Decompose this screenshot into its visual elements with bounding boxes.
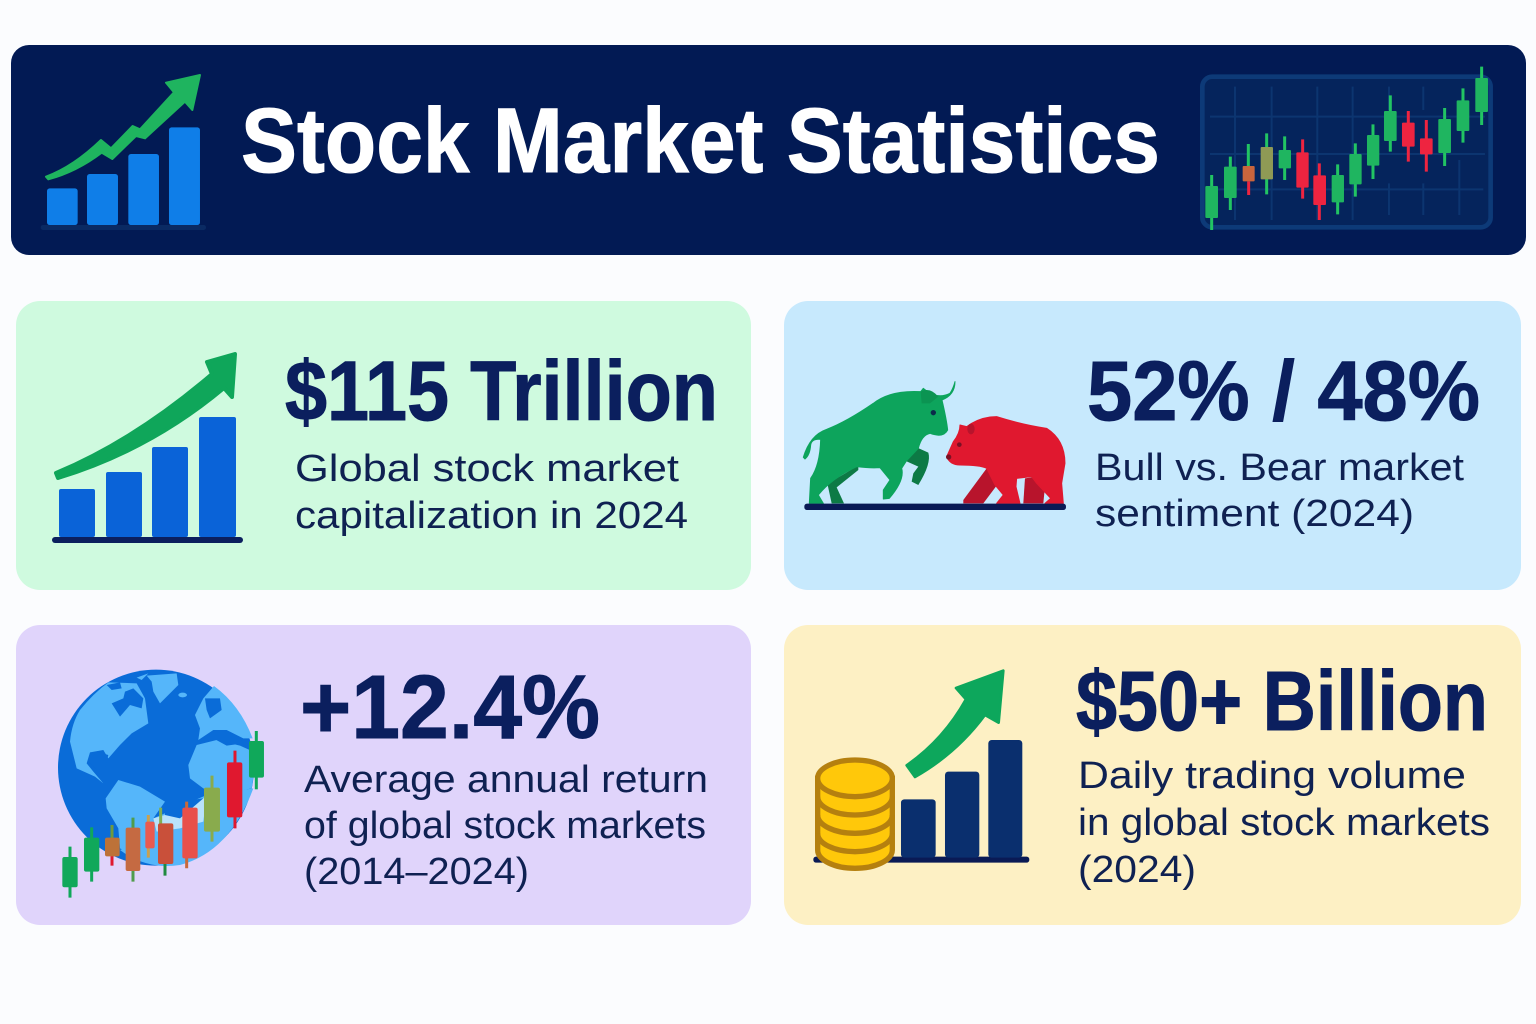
stat value: 52% / 48% — [1087, 344, 1480, 438]
stat value: $50+ Billion — [1076, 654, 1488, 748]
description line two: capitalization in 2024 — [295, 495, 688, 537]
icon: header bar chart with rising arrow — [41, 75, 206, 230]
description line two: sentiment (2024) — [1095, 493, 1414, 535]
panel: daily trading volume — [784, 625, 1521, 925]
description line three: (2024) — [1078, 849, 1196, 891]
title: Stock Market Statistics — [241, 90, 1160, 192]
icon: bar chart with arrow — [52, 354, 243, 543]
stat value: +12.4% — [300, 658, 600, 758]
icon: candlestick chart panel — [1202, 67, 1491, 230]
stat value: $115 Trillion — [285, 344, 718, 438]
icon: bull and bear — [803, 382, 1066, 510]
panel: average annual return — [16, 625, 751, 925]
description line two: in global stock markets — [1078, 802, 1490, 844]
description: Global stock market — [295, 448, 679, 490]
description line three: (2014–2024) — [304, 851, 529, 893]
description: Daily trading volume — [1078, 755, 1466, 797]
panel: bull vs bear sentiment — [784, 301, 1521, 590]
description line two: of global stock markets — [304, 805, 706, 847]
icon: coins, bars and arrow — [813, 671, 1029, 868]
panel: global market capitalization — [16, 301, 751, 590]
description: Average annual return — [304, 759, 708, 801]
description: Bull vs. Bear market — [1095, 447, 1464, 489]
icon: globe with candlesticks — [58, 670, 264, 898]
header banner — [11, 45, 1526, 255]
